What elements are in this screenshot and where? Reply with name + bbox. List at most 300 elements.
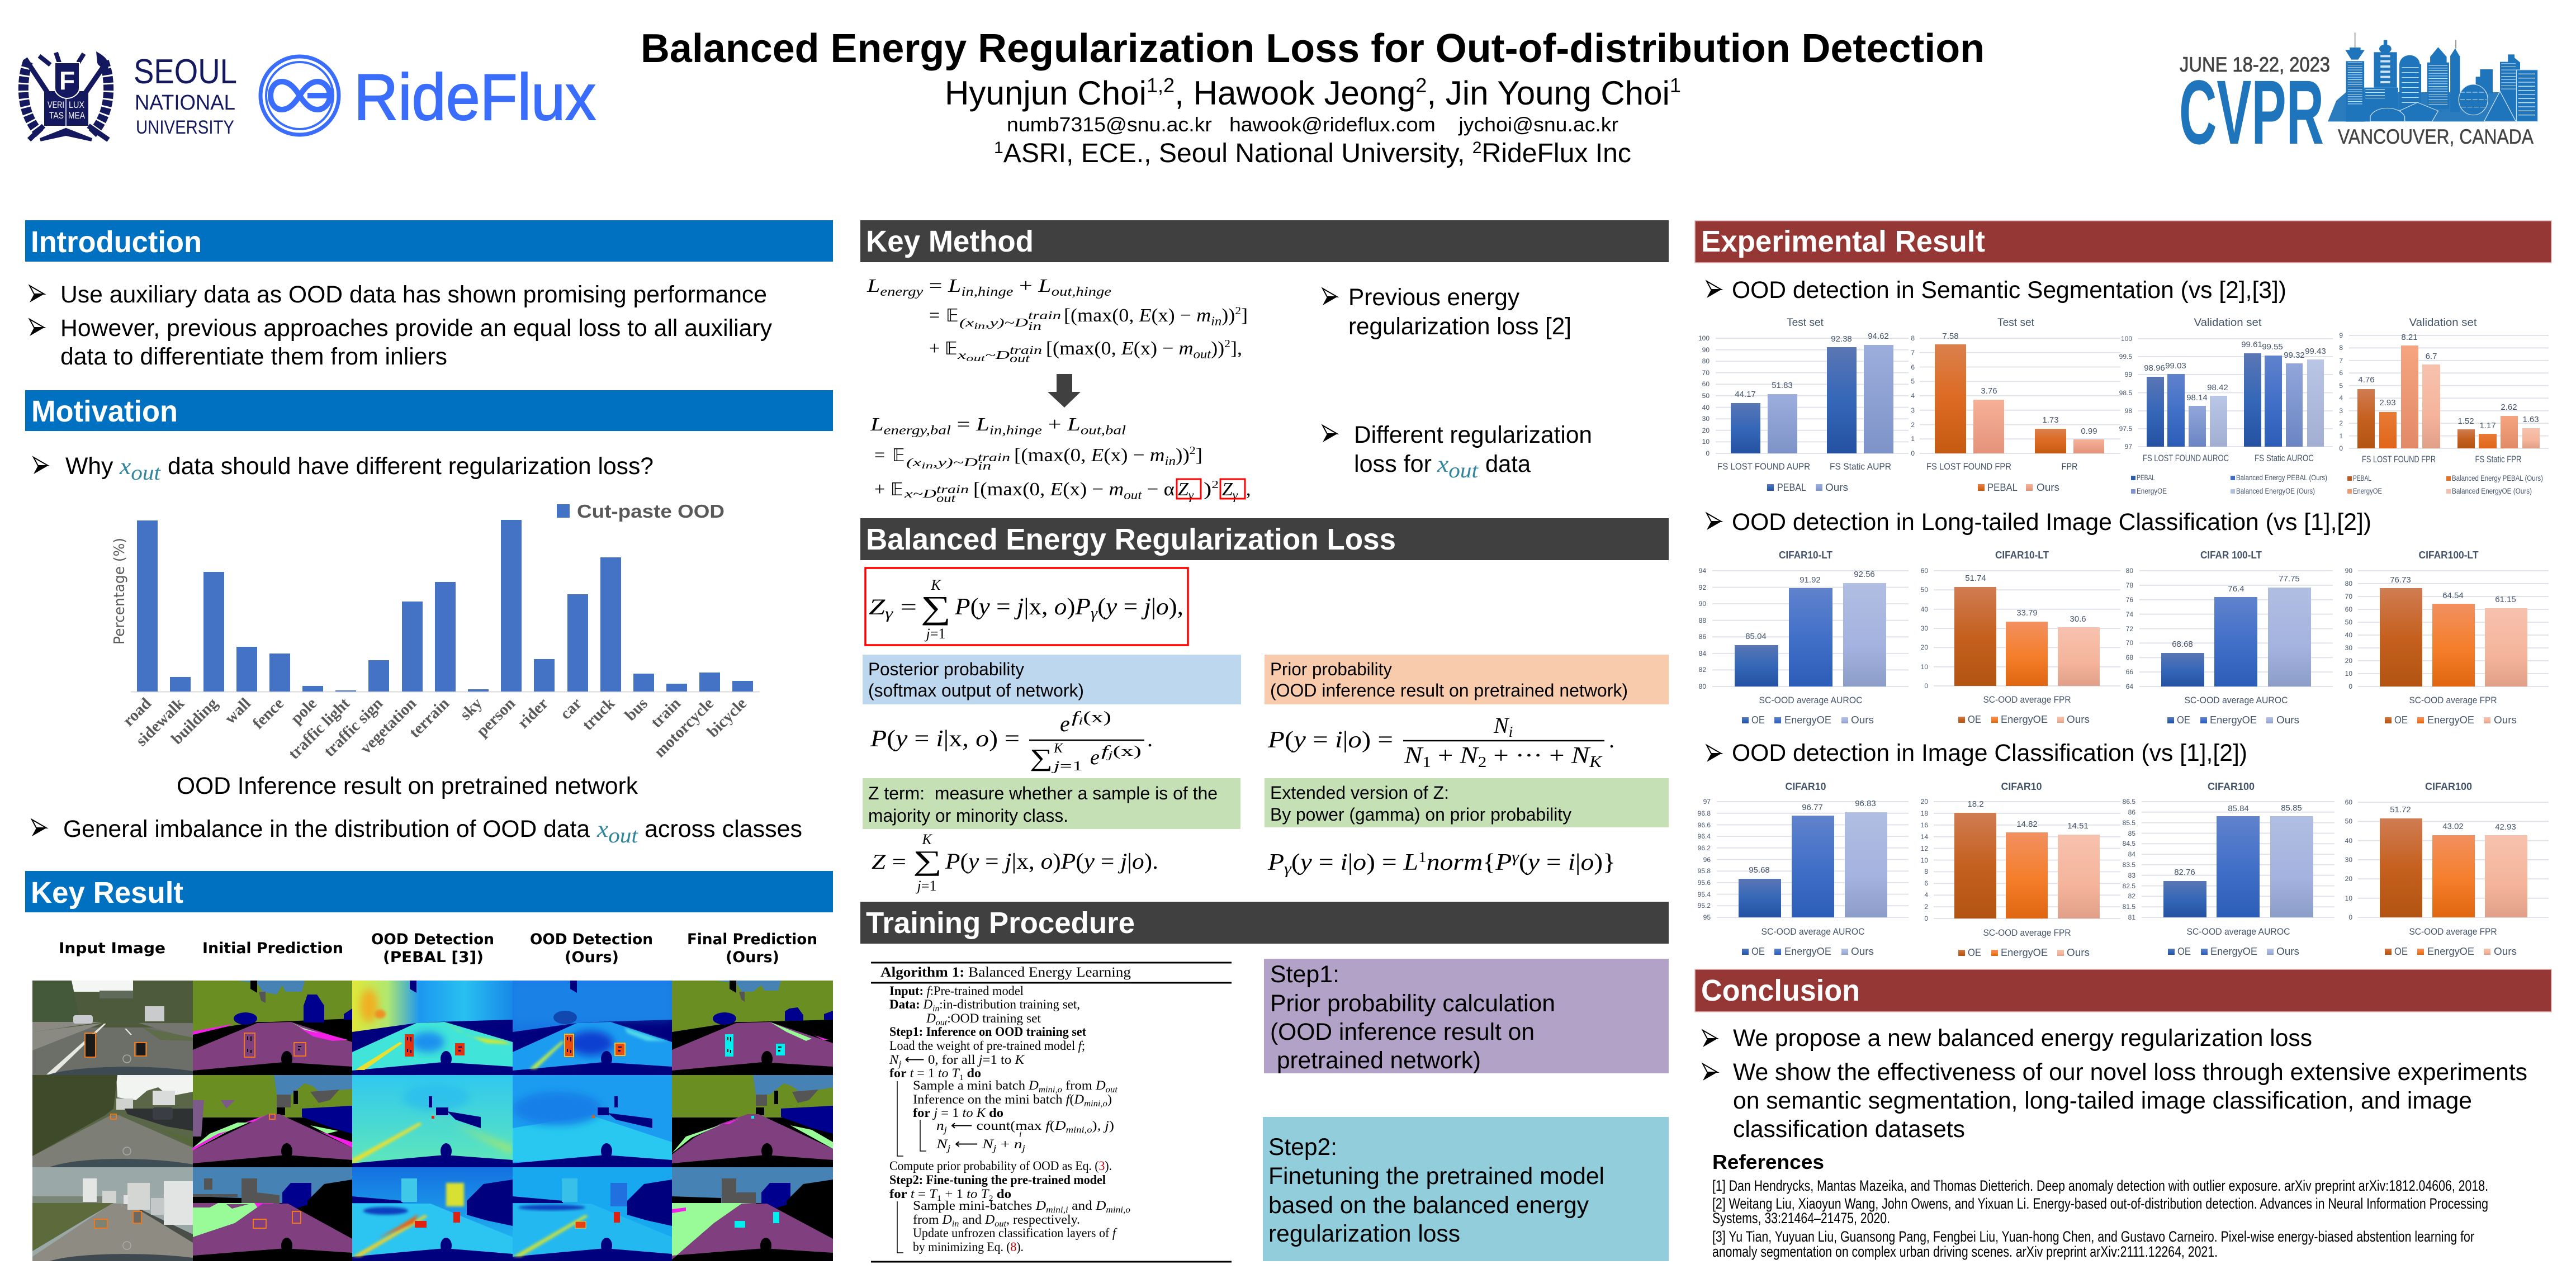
bar chart: CIFAR100 AUROC: 85 [2128, 830, 2135, 837]
bar chart: CIFAR10-LT FPR: 51.74 [1965, 574, 1986, 583]
equation: previous energy loss: train [1028, 309, 1061, 322]
callout: prior probability [1265, 655, 1669, 704]
bar chart: CIFAR100 AUROC: 81.5 [2123, 903, 2135, 911]
algorithm box: Input: f:Pre-trained model [889, 984, 1024, 998]
bar chart: CIFAR10-LT AUROC: 84 [1699, 650, 1706, 657]
image: OOD detection PEBAL row 1 [352, 981, 513, 1075]
bar chart: Test set FPR: 6 [1911, 363, 1915, 371]
equation: P gamma: y = i|o) = L [1300, 850, 1417, 875]
algorithm box: Update unfrozen classification layers of f [913, 1226, 1117, 1240]
bar chart: CIFAR100 AUROC: 85.84 [2228, 804, 2249, 813]
bar chart: CIFAR100 AUROC: 81 [2128, 913, 2135, 921]
equation: previous energy loss: ,y)~D [985, 316, 1028, 329]
equation: balanced energy loss: )) [1176, 445, 1190, 466]
equation: Z [872, 831, 1158, 894]
equation box: Z gamma: j=1 [925, 626, 945, 642]
bar chart: CIFAR10 AUROC: 96.4 [1698, 832, 1711, 840]
bar chart: CIFAR 100-LT AUROC: 72 [2126, 625, 2133, 633]
equation: posterior [870, 709, 1153, 774]
bar chart: CIFAR 100-LT AUROC: 76.4 [2228, 584, 2244, 594]
bar chart: CIFAR100 AUROC: 83 [2128, 872, 2135, 879]
heading: key method: Key Method [866, 225, 1034, 258]
title: Balanced Energy Regularization Loss for Out-of-distribution Detection [641, 26, 1985, 71]
equation: previous energy loss: in,hinge [961, 285, 1013, 299]
bar chart: CIFAR100 FPR: CIFAR100 [2425, 781, 2472, 792]
y axis label: Percentage (%) [111, 538, 128, 645]
bar chart: CIFAR100 AUROC: CIFAR100 [2208, 781, 2255, 792]
bar chart: CIFAR10-LT FPR: 50 [1921, 586, 1928, 594]
emblem: VERI [48, 100, 64, 110]
subheading: image classification: OOD detection in Image Classification (vs [1],[2]) [1732, 740, 2247, 766]
bar chart: CIFAR100-LT FPR: 76.73 [2390, 575, 2411, 585]
algorithm box: Algorithm 1: Balanced Energy Learning [880, 965, 1131, 980]
bar chart: CIFAR10 FPR: OE [1968, 947, 1981, 958]
bar chart: CIFAR10-LT AUROC: 88 [1699, 617, 1706, 624]
bar chart: CIFAR10 FPR: 12 [1921, 845, 1928, 853]
bar chart: CIFAR10 FPR: 14.51 [2067, 821, 2089, 831]
equation: balanced energy loss: Z [1178, 479, 1189, 500]
equation: previous energy loss: L [948, 276, 961, 296]
heading: motivation: Motivation [31, 395, 178, 428]
algorithm box: D [926, 1011, 936, 1025]
bar chart: CIFAR10 FPR: SC-OOD average FPR [1983, 927, 2071, 938]
bar chart: Test set FPR: 1.73 [2042, 415, 2059, 425]
image: initial prediction row 3 [193, 1167, 352, 1261]
equation: previous energy loss: 2 [1235, 305, 1241, 317]
emblem: LUX [69, 100, 84, 110]
bullet text: previous loss: Previous energy [1348, 284, 1520, 311]
university name: UNIVERSITY [136, 117, 234, 138]
bar chart: Test set AUPR: FS Static AUPR [1830, 461, 1891, 472]
algorithm box: j=1 to K [979, 1053, 1024, 1067]
bar chart: Test set FPR: 7 [1911, 349, 1915, 357]
heading: conclusion [1695, 969, 2551, 1012]
equation: previous energy loss: ] [1241, 305, 1248, 326]
bar chart: CIFAR100-LT FPR: 60 [2345, 605, 2352, 613]
equation: balanced energy loss: out [1124, 488, 1142, 503]
algorithm box: j) [1105, 1119, 1114, 1133]
image: initial prediction row 2 [193, 1075, 352, 1167]
bar chart: Test set AUPR: 60 [1702, 380, 1710, 388]
equation: previous energy loss: 2 [1224, 338, 1230, 350]
algorithm box: ) [1107, 1092, 1112, 1106]
bullet text: why different loss: Why [65, 453, 113, 480]
class labels: road [120, 694, 155, 730]
bar chart: CIFAR10-LT FPR: OE [1968, 714, 1981, 725]
bullet text: previous loss [1323, 284, 1571, 340]
bar chart: Test set AUPR: 50 [1702, 392, 1710, 400]
bar chart: CIFAR10 FPR: 16 [1921, 821, 1928, 829]
bar chart: CIFAR10-LT AUROC: 86 [1699, 633, 1706, 641]
equation: balanced energy loss: out,bal [1081, 423, 1126, 438]
bar chart: Test set FPR: FS LOST FOUND FPR [1926, 461, 2011, 472]
authors: 1,2 [1147, 74, 1175, 97]
equation: balanced energy loss: x~D [903, 487, 936, 500]
bar chart: CIFAR100 FPR [2345, 781, 2549, 957]
bar chart: CIFAR100-LT FPR: 50 [2345, 618, 2352, 626]
bar chart: CIFAR10 AUROC: 96.6 [1698, 821, 1711, 829]
bar chart: CIFAR10-LT FPR: Ours [2067, 714, 2090, 725]
algorithm box: 1 [959, 1073, 964, 1082]
bar chart: Validation set AUROC: EnergyOE [2137, 487, 2167, 495]
references: References [1712, 1150, 1824, 1173]
bar chart: Validation set FPR: 8.21 [2401, 333, 2418, 342]
bar chart: CIFAR 100-LT AUROC: 68 [2126, 654, 2133, 661]
bullet text: why different loss: out [131, 461, 162, 485]
bar chart: Validation set AUROC: Balanced EnergyOE (Ours) [2236, 487, 2315, 495]
logo: CVPR 2023: JUNE 18-22, 2023 [2180, 53, 2330, 76]
equation: Z: j=1 [916, 878, 936, 894]
bar chart: Test set FPR: 5 [1911, 377, 1915, 385]
bar chart: CIFAR10 FPR: 2 [1924, 903, 1928, 911]
bar chart: Test set FPR: 8 [1911, 334, 1915, 342]
bar chart: CIFAR10 FPR: 4 [1924, 891, 1928, 899]
bullet text: new loss: We propose a new balanced energy regularization loss [1733, 1025, 2312, 1052]
bar chart: CIFAR10 FPR: 0 [1924, 915, 1928, 922]
bar chart: Validation set FPR: 2.93 [2379, 398, 2396, 408]
equation: balanced energy loss: in [921, 461, 933, 471]
bar chart: CIFAR100 FPR: EnergyOE [2427, 946, 2474, 957]
equation: prior: K [1589, 754, 1603, 771]
bullet text: equal loss [30, 315, 773, 370]
bar chart: CIFAR10 FPR: 6 [1924, 879, 1928, 887]
equation: balanced energy loss: train [936, 482, 969, 496]
bar chart: Validation set FPR: 2.62 [2501, 402, 2517, 412]
heading: balanced energy regularization loss [860, 518, 1669, 560]
bullet text: auxiliary data: Use auxiliary data as OOD data has shown promising performance [60, 281, 767, 308]
bar chart: CIFAR100 FPR: OE [2394, 946, 2408, 957]
panel: conclusion [1695, 969, 2551, 1260]
bar chart: CIFAR100 FPR: 40 [2345, 837, 2352, 845]
bar chart: Test set AUPR: FS LOST FOUND AUPR [1717, 461, 1810, 472]
equation: balanced energy loss: (x [906, 456, 915, 469]
bar chart: Validation set AUROC: 99.55 [2262, 342, 2283, 352]
algorithm box: for t = T [889, 1187, 936, 1201]
equation: posterior: (x) [1083, 709, 1111, 726]
column: right [1695, 221, 2551, 1260]
algorithm box: ⟵ 0, for all [901, 1053, 979, 1067]
bullet text: why different loss: x [120, 454, 130, 480]
bar chart: Test set AUPR: 0 [1706, 449, 1710, 457]
panel: key method [860, 220, 1669, 505]
algorithm box: from [1062, 1078, 1096, 1092]
bar chart: CIFAR10 AUROC: 96.83 [1855, 799, 1876, 808]
panel: key result [25, 871, 833, 1261]
image: OOD detection PEBAL row 3 [352, 1167, 513, 1261]
bar chart: CIFAR100 FPR: Ours [2494, 946, 2517, 957]
class labels: motorcycle [651, 694, 717, 761]
bar chart: CIFAR100 AUROC: 82.76 [2174, 868, 2195, 877]
subheading: long-tailed: OOD detection in Long-tailed Image Classification (vs [1],[2]) [1732, 509, 2371, 536]
bar chart: CIFAR100-LT FPR: 20 [2345, 657, 2352, 665]
bar chart: Validation set FPR: 0 [2339, 444, 2343, 452]
bar chart: Validation set FPR: Balanced EnergyOE (Ours) [2452, 487, 2532, 495]
bar chart: Validation set AUROC: 99.03 [2165, 361, 2186, 371]
equation: previous energy loss: x [958, 348, 963, 362]
bar chart: Validation set FPR: Balanced Energy PEBAL (Ours) [2452, 474, 2543, 482]
bar chart: Validation set AUROC: 98.96 [2144, 363, 2165, 373]
bar chart: CIFAR 100-LT AUROC: CIFAR 100-LT [2200, 550, 2262, 561]
algorithm box: in [932, 1004, 939, 1014]
bar chart: CIFAR10-LT AUROC: 82 [1699, 666, 1706, 674]
equation: posterior: f [1101, 743, 1112, 759]
bar chart: CIFAR100 AUROC: 82.5 [2123, 882, 2135, 890]
bar chart: CIFAR10 AUROC: 95.4 [1698, 891, 1711, 898]
bar chart: CIFAR10 AUROC: 95.8 [1698, 867, 1711, 875]
bar chart: CIFAR10 FPR: 20 [1921, 798, 1928, 806]
equation: posterior: f [1072, 709, 1081, 726]
equation: previous energy loss: L [866, 276, 880, 296]
column headings: (Ours) [726, 949, 779, 966]
bar chart: Validation set AUROC: Balanced Energy PEBAL (Ours) [2236, 473, 2327, 482]
equation: previous energy loss [866, 276, 1248, 365]
bar chart: CIFAR100 AUROC: Ours [2276, 946, 2299, 957]
bar chart: Validation set FPR: 8 [2339, 344, 2343, 352]
bar chart: Validation set FPR: 1 [2339, 432, 2343, 440]
bar chart: CIFAR100 AUROC: 85.5 [2123, 819, 2135, 827]
equation: previous energy loss: )) [1211, 338, 1224, 359]
bar chart: CIFAR100 FPR: 51.72 [2390, 805, 2411, 815]
equation box: Z gamma: y = j|o), [1106, 594, 1182, 620]
bar chart: Validation set FPR: 1.17 [2479, 421, 2496, 430]
bar chart: Test set FPR: PEBAL [1987, 482, 2018, 493]
header band [23, 26, 2538, 168]
bullet text: different loss: data [1485, 451, 1531, 477]
equation: P gamma: 1 [1418, 849, 1427, 865]
equation: prior: N [1493, 713, 1510, 738]
chart caption: OOD Inference result on pretrained network [177, 773, 638, 799]
bar chart: CIFAR 100-LT AUROC: SC-OOD average AUROC [2185, 695, 2288, 705]
equation: Z: P(y = j|x, o)P(y = j|o). [945, 849, 1158, 874]
algorithm box: from D [913, 1213, 951, 1227]
bar chart: CIFAR10 AUROC: SC-OOD average AUROC [1761, 926, 1865, 937]
equation: balanced energy loss: γ [1188, 488, 1194, 503]
bar chart: Test set FPR: 2 [1911, 421, 1915, 429]
bar chart: Test set FPR: 7.58 [1942, 332, 1959, 341]
bar chart: CIFAR10-LT FPR [1921, 550, 2120, 725]
bar chart: CIFAR10-LT AUROC: SC-OOD average AUROC [1759, 695, 1863, 705]
algorithm box: i [1019, 1130, 1021, 1139]
bar chart: Validation set FPR: PEBAL [2353, 474, 2371, 482]
algorithm box: Sample mini-batches D [913, 1199, 1045, 1213]
algorithm box [871, 963, 1232, 1262]
algorithm box: 1 [937, 1194, 941, 1203]
algorithm box: 2 [988, 1194, 993, 1203]
bullet text: effectiveness: on semantic segmentation, long-tailed image classification, and image [1733, 1087, 2472, 1114]
bar chart: Validation set FPR: 1.63 [2522, 415, 2539, 424]
bar chart: CIFAR 100-LT AUROC: 76 [2126, 596, 2133, 604]
bar chart: CIFAR10 FPR: 14.82 [2016, 820, 2038, 829]
equation box: Z gamma: γ [885, 605, 894, 622]
bar chart: CIFAR100 FPR: 43.02 [2442, 822, 2464, 831]
bar chart: Validation set AUROC: Validation set [2194, 317, 2262, 329]
callout: posterior probability: (softmax output of network) [868, 680, 1084, 700]
equation: P gamma: ( [1291, 850, 1300, 875]
bullet text: different loss: x [1437, 452, 1448, 477]
bar chart: Validation set FPR: 4 [2339, 394, 2343, 402]
logo: CVPR 2023: VANCOUVER, CANADA [2338, 125, 2534, 148]
callout: step 1: (OOD inference result on [1270, 1019, 1535, 1045]
equation: prior: N [1404, 743, 1424, 769]
algorithm box: Load the weight of pre-trained model f; [889, 1039, 1085, 1053]
heading: experimental result: Experimental Result [1701, 225, 1985, 258]
heading: key result: Key Result [31, 877, 183, 910]
class labels: traffic sign [320, 694, 386, 760]
callout: extended version [1265, 778, 1669, 827]
equation: balanced energy loss: ) [1204, 479, 1210, 500]
bar chart: CIFAR100-LT FPR: EnergyOE [2427, 714, 2474, 726]
bar chart: Test set AUPR: 80 [1702, 357, 1710, 365]
class labels: sky [457, 694, 486, 724]
affiliations: 1 [994, 139, 1003, 157]
equation: previous energy loss: ~D [985, 348, 1010, 362]
bullet text: equal loss: However, previous approaches provide an equal loss to all auxiliary [60, 315, 773, 342]
algorithm box: out [995, 1219, 1007, 1229]
bullet text: different loss [1323, 422, 1592, 482]
authors: , Hawook Jeong [1175, 74, 1415, 112]
bar chart: CIFAR10 AUROC: CIFAR10 [1786, 781, 1826, 792]
algorithm box: N [982, 1137, 995, 1151]
bar chart: CIFAR100 AUROC: 86.5 [2123, 798, 2135, 806]
algorithm box: by minimizing Eq. (8). [913, 1240, 1024, 1254]
bullet text: effectiveness [1703, 1059, 2527, 1143]
bar chart: CIFAR 100-LT AUROC: 64 [2126, 683, 2133, 690]
bar chart: CIFAR100 AUROC: 83.5 [2123, 861, 2135, 869]
bar chart: CIFAR100 AUROC: 85.85 [2281, 803, 2302, 813]
bullet text: why different loss [34, 453, 654, 485]
class labels [120, 694, 750, 763]
algorithm box: + [996, 1137, 1014, 1151]
algorithm box: for j = 1 to K do [913, 1106, 1003, 1120]
equation: balanced energy loss: L [976, 414, 989, 435]
equation: balanced energy loss: train [978, 451, 1010, 464]
equation: balanced energy loss: ] [1196, 445, 1202, 466]
callout: posterior probability [863, 655, 1241, 704]
bar chart: CIFAR100 AUROC: EnergyOE [2210, 946, 2257, 957]
bar chart: Test set FPR: Ours [2037, 482, 2059, 493]
bar chart: CIFAR10-LT AUROC: Ours [1851, 714, 1874, 726]
bar chart: CIFAR100-LT FPR: 80 [2345, 580, 2352, 588]
bar chart: Validation set AUROC: 99.32 [2284, 351, 2305, 360]
bar chart: CIFAR 100-LT AUROC: 74 [2126, 610, 2133, 618]
bar chart: CIFAR100 AUROC: OE [2177, 946, 2191, 957]
university name [134, 53, 237, 138]
bar chart: CIFAR10 AUROC: 95.2 [1698, 902, 1711, 910]
bar chart: CIFAR10-LT AUROC: 80 [1699, 683, 1706, 690]
algorithm box: Step1: Inference on OOD training set [889, 1025, 1086, 1039]
bar chart: CIFAR10-LT FPR: 40 [1921, 605, 1928, 613]
bar chart: CIFAR10 AUROC: 96 [1703, 856, 1711, 864]
subheading: semantic segmentation: OOD detection in Semantic Segmentation (vs [2],[3]) [1732, 277, 2286, 304]
bar chart: Validation set FPR: 6.7 [2426, 352, 2437, 361]
algorithm box: D [984, 1213, 995, 1227]
algorithm box: mini,o [1066, 1125, 1092, 1135]
bullet text: imbalance: x [597, 817, 608, 842]
emblem: TAS [49, 110, 64, 121]
logo: Seoul National University [23, 51, 237, 140]
algorithm box: ⟵ count(max [947, 1119, 1045, 1133]
bar chart: CIFAR10 FPR: 18.2 [1967, 799, 1984, 809]
algorithm box: to T [967, 1187, 990, 1201]
heading: balanced energy regularization loss: Balanced Energy Regularization Loss [866, 523, 1396, 556]
bullet text: imbalance: out [608, 824, 639, 847]
equation: balanced energy loss: 2 [1211, 479, 1219, 491]
bar chart: CIFAR10 AUROC: 96.2 [1698, 844, 1711, 852]
bullet text: imbalance: across classes [645, 816, 802, 842]
equation: balanced energy loss: in [978, 459, 991, 472]
equation: balanced energy loss: + [1042, 414, 1067, 435]
equation: balanced energy loss: = [951, 414, 976, 435]
equation: balanced energy loss: energy,bal [884, 423, 951, 438]
bar chart: CIFAR10 AUROC: 97 [1703, 798, 1711, 806]
algorithm box: out [936, 1018, 948, 1027]
bar chart: Validation set AUROC: 98.14 [2186, 393, 2208, 402]
equation: prior: N [1459, 743, 1479, 769]
bar chart: Test set AUPR: 94.62 [1868, 332, 1889, 341]
bar chart: CIFAR10 FPR: 14 [1921, 833, 1928, 841]
equation box: Z gamma: P(y = j|x, o)P [955, 594, 1090, 620]
class labels: fence [249, 694, 287, 732]
equation: balanced energy loss: in [1165, 454, 1176, 468]
bar chart: CIFAR10-LT FPR: EnergyOE [2001, 714, 2048, 725]
bar chart: CIFAR100 AUROC [2123, 781, 2334, 957]
bar chart: Validation set AUROC: 99.61 [2241, 340, 2262, 349]
bullet text: different loss: Different regularization [1354, 422, 1592, 448]
bar chart: Validation set FPR: 9 [2339, 332, 2343, 339]
equation: previous energy loss: ], [1230, 338, 1242, 359]
bar chart: CIFAR10-LT FPR: 60 [1921, 567, 1928, 575]
bar chart: CIFAR 100-LT AUROC [2126, 550, 2333, 726]
bullet text: previous loss: regularization loss [2] [1348, 313, 1571, 340]
bar chart: Validation set FPR: 6 [2339, 369, 2343, 377]
column headings: (PEBAL [3]) [383, 949, 484, 966]
equation: balanced energy loss: + [874, 479, 885, 500]
algorithm box: mini,i [1046, 1205, 1068, 1215]
bar chart: CIFAR10 AUROC: 95.6 [1698, 879, 1711, 887]
algorithm box: n [936, 1119, 944, 1133]
equation box: Z gamma: = [893, 594, 917, 619]
bar chart: CIFAR100 FPR: 50 [2345, 817, 2352, 825]
bar chart: CIFAR10-LT AUROC [1699, 550, 1909, 726]
equation: P gamma: ( [1519, 850, 1528, 875]
heading: introduction [25, 220, 833, 262]
bar chart: Validation set AUROC: 97.5 [2119, 425, 2132, 433]
bar chart: CIFAR10-LT AUROC: 92 [1699, 584, 1706, 591]
bar chart: Validation set FPR: 4.76 [2358, 375, 2375, 385]
algorithm box: D [1095, 1078, 1106, 1092]
heading: training procedure [860, 902, 1669, 944]
bar chart: CIFAR10-LT FPR: 20 [1921, 643, 1928, 651]
bar chart: CIFAR 100-LT AUROC: EnergyOE [2210, 714, 2257, 726]
equation: posterior: P(y = i|x, o) = [870, 726, 1020, 752]
bar chart: Validation set FPR: 3 [2339, 407, 2343, 415]
heading: introduction: Introduction [31, 226, 202, 259]
bar chart: CIFAR100-LT FPR [2345, 550, 2549, 726]
class labels: bus [622, 694, 651, 724]
bar chart: CIFAR100-LT FPR: 40 [2345, 631, 2352, 639]
algorithm box: j [1021, 1144, 1025, 1153]
bar chart: Validation set AUROC: FS LOST FOUND AUROC [2143, 453, 2229, 463]
image: OOD detection ours row 2 [513, 1075, 672, 1167]
equation: previous energy loss: = [923, 276, 948, 296]
class labels: bicycle [704, 694, 750, 741]
equation: balanced energy loss: Z [1222, 479, 1233, 500]
emblem: F [59, 66, 75, 95]
bar chart: Validation set FPR [2339, 317, 2549, 495]
equation: previous energy loss: out [1194, 347, 1211, 362]
image: OOD detection ours row 3 [513, 1167, 672, 1261]
column headings: Initial Prediction [202, 940, 343, 957]
